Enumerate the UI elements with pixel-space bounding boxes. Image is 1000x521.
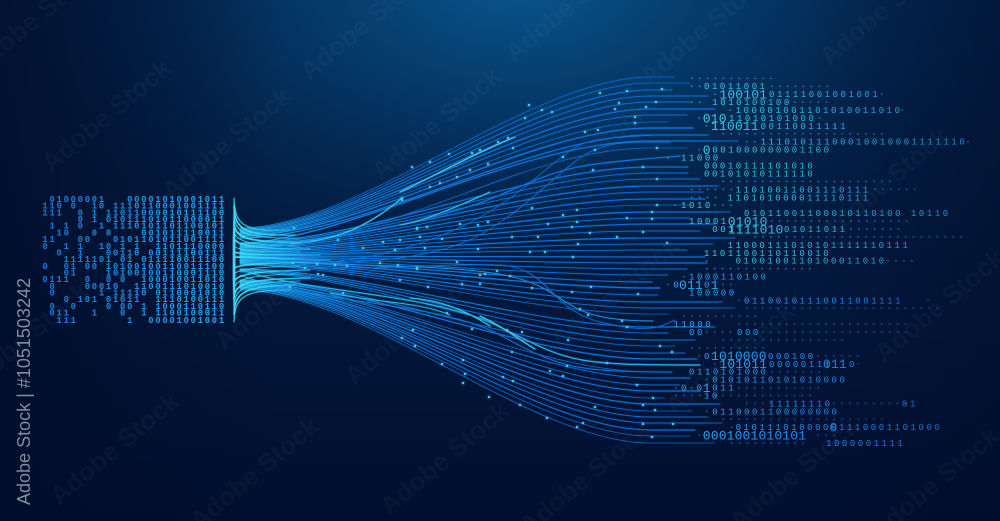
right binary stream, upper teal part: 110011 bbox=[711, 119, 759, 134]
middle lower bundle bbox=[240, 257, 735, 346]
right binary stream, upper teal part: 01011001 bbox=[704, 82, 768, 92]
right binary stream, lower blue part: 0 bbox=[681, 384, 689, 394]
right binary stream, upper teal part: 00110011111 bbox=[761, 122, 848, 132]
left binary block: 111 1 00001001001 bbox=[42, 316, 226, 326]
left binary block: 0 00010 1100111010010 bbox=[42, 282, 226, 292]
lower horn strokes bbox=[234, 262, 320, 322]
stock watermarks: Adobe Stock bbox=[209, 230, 350, 356]
left binary block: 110 0 10 1110110001001111 bbox=[42, 202, 226, 212]
stock watermarks: Adobe Stock bbox=[514, 95, 655, 221]
vertical stock id: Adobe Stock | #1051503242 bbox=[14, 278, 34, 505]
stock watermarks: Adobe Stock bbox=[156, 80, 297, 206]
right binary stream, upper teal part: 100101 bbox=[719, 88, 767, 102]
right binary stream, lower blue part: 1000001111 bbox=[826, 439, 906, 449]
right binary stream, upper teal part: 11010101000 bbox=[729, 114, 816, 124]
middle upper bundle bbox=[240, 135, 738, 257]
right binary stream, upper teal part bbox=[668, 78, 969, 269]
right binary stream, lower blue part: 0 bbox=[830, 420, 837, 436]
left binary block: 0 101 01011 1110100111 bbox=[42, 295, 226, 305]
right binary stream, upper teal part: 1101100110110010 bbox=[704, 249, 831, 259]
stock watermarks: Adobe Stock bbox=[544, 230, 685, 356]
right binary stream, upper teal part: 001000000001100 bbox=[712, 146, 832, 156]
right binary stream, upper teal part: 100001001101010011010 bbox=[736, 106, 903, 116]
left binary block bbox=[42, 195, 226, 326]
left binary block: 1111101 01 011110011100 bbox=[42, 255, 226, 265]
right binary stream, upper teal part: 0 bbox=[703, 143, 711, 158]
right binary stream, lower blue part: 0 bbox=[704, 280, 712, 290]
right binary stream, upper teal part: 11101011100010010001111110 bbox=[761, 138, 967, 148]
right binary stream, upper teal part: 1111010 bbox=[728, 222, 783, 237]
stock watermarks: Adobe Stock bbox=[44, 385, 185, 511]
stock watermarks: Adobe Stock bbox=[374, 395, 515, 521]
left binary block: 0 0 0 00 1 1000110110 bbox=[42, 302, 226, 312]
left binary block: 0111 0 0 0 100010011010 bbox=[42, 275, 226, 285]
right binary stream, lower blue part: 1110001101000 bbox=[839, 423, 942, 433]
left binary block: 01000001 00001010001011 bbox=[42, 195, 226, 205]
right binary stream, upper teal part: 1010100100 bbox=[712, 98, 792, 108]
stock watermarks: Adobe Stock bbox=[659, 295, 800, 421]
right binary stream, upper teal part: 11000 bbox=[681, 154, 721, 164]
left binary block: 10 0 0 001011110011 bbox=[42, 228, 226, 238]
left binary block: 01 10100100110001110 bbox=[42, 268, 226, 278]
fading dot rows bbox=[668, 78, 969, 269]
right binary stream, lower blue part: 1 bbox=[703, 381, 711, 396]
right binary stream, lower blue part: 0110001100000000 bbox=[712, 407, 840, 417]
right binary stream, lower blue part: 11111110 bbox=[769, 399, 833, 409]
right binary stream, upper teal part: 01011011 bbox=[784, 225, 848, 235]
right binary stream, lower blue part: 11000 bbox=[673, 320, 713, 330]
right binary stream, upper teal part: 010 bbox=[703, 111, 727, 126]
right binary stream, lower blue part: 011 bbox=[712, 384, 736, 394]
right binary stream, lower blue part: 011 1 bbox=[679, 278, 719, 293]
left binary block: 0 1 1 10 1 1 1101110000 bbox=[42, 242, 226, 252]
stock watermarks: Adobe Stock bbox=[814, 120, 955, 246]
right binary stream, lower blue part: 000100 bbox=[768, 352, 816, 362]
left binary block: 0 1 01011101011000011 bbox=[42, 215, 226, 225]
right binary stream, lower blue part: 0 bbox=[697, 384, 705, 394]
right binary stream, upper teal part: 1010 bbox=[681, 201, 713, 211]
lower bundle bbox=[240, 280, 722, 443]
right binary stream, upper teal part: 001 bbox=[712, 225, 736, 235]
light sparks on the lines bbox=[290, 89, 673, 437]
right binary stream, lower blue part: 10 bbox=[704, 392, 720, 402]
upper horn strokes bbox=[234, 198, 330, 260]
left binary block: 0 1 11110 0110001010 bbox=[42, 288, 226, 298]
right binary stream, lower blue part: 01 bbox=[902, 399, 918, 409]
right binary stream, lower blue part: 0 bbox=[849, 360, 857, 370]
left binary block: 111 0 1 11011000010111100 bbox=[42, 208, 226, 218]
right binary stream, upper teal part: 01011001100010110100 10110 bbox=[744, 209, 951, 219]
right binary stream, upper teal part: 00010111101010 bbox=[704, 162, 815, 172]
data stream lines fan bbox=[240, 77, 738, 443]
right binary stream, upper teal part: 110101000011110111 bbox=[728, 193, 871, 203]
stock watermarks: Adobe Stock bbox=[366, 60, 507, 186]
right binary stream, upper teal part: 0100100110100011010 bbox=[736, 257, 887, 267]
left binary block: 0 1 00110 00111100111 bbox=[42, 248, 226, 258]
left binary block: 011 1 0 1 1100100011 bbox=[42, 309, 226, 319]
right binary stream, lower blue part: 0 bbox=[704, 352, 712, 362]
root horn of the fan bbox=[233, 196, 330, 323]
right binary stream, upper teal part: 11010011001110111 bbox=[736, 185, 871, 195]
left binary block: 1 1 0 1 1110101101100101 bbox=[42, 222, 226, 232]
right binary stream, lower blue part: 101011 bbox=[719, 357, 767, 372]
wavy crossing lines bbox=[240, 135, 700, 372]
right binary stream, upper teal part: 11000111010101111110111 bbox=[728, 241, 910, 251]
right binary stream, upper teal part: 01010 bbox=[728, 214, 768, 229]
right binary stream, lower blue part: 0 bbox=[673, 280, 681, 290]
stock watermarks: Adobe Stock bbox=[36, 52, 177, 178]
upper bundle bbox=[240, 77, 715, 236]
right binary stream, upper teal part: 01111001001001 bbox=[769, 90, 880, 100]
right binary stream, lower blue part: 0101110100000 bbox=[736, 423, 839, 433]
left binary block: 0 01 00 10100100110011100 bbox=[42, 262, 226, 272]
right binary stream, lower blue part: 000 bbox=[737, 328, 761, 338]
cyan highlights bbox=[290, 137, 535, 349]
right binary stream, lower blue part: 100000 bbox=[689, 288, 737, 298]
stock watermarks: Adobe Stock bbox=[339, 265, 480, 391]
right binary stream, lower blue part: 011 bbox=[823, 357, 847, 372]
right binary stream, lower blue part: 00000111 bbox=[769, 360, 833, 370]
right binary stream, upper teal part: 10001 bbox=[689, 217, 729, 227]
right binary stream, lower blue part bbox=[668, 273, 942, 449]
vertical spine bbox=[233, 196, 235, 323]
fading dot rows bbox=[668, 277, 939, 443]
right binary stream, lower blue part: 0001001010101 bbox=[703, 428, 806, 444]
right binary stream, lower blue part: 00 bbox=[689, 328, 705, 338]
right binary stream, lower blue part: 01100101110011001111 bbox=[744, 296, 903, 306]
right binary stream, lower blue part: 1010000 bbox=[711, 349, 767, 364]
right binary stream, upper teal part: 00101010111110 bbox=[704, 170, 815, 180]
right binary stream, lower blue part: 01010110101010000 bbox=[712, 376, 847, 386]
right binary stream, lower blue part: 0110101000 bbox=[689, 368, 769, 378]
left binary block: 11 00 0101101011001111 bbox=[42, 235, 226, 245]
right binary stream, lower blue part: 1000110100 bbox=[689, 273, 769, 283]
